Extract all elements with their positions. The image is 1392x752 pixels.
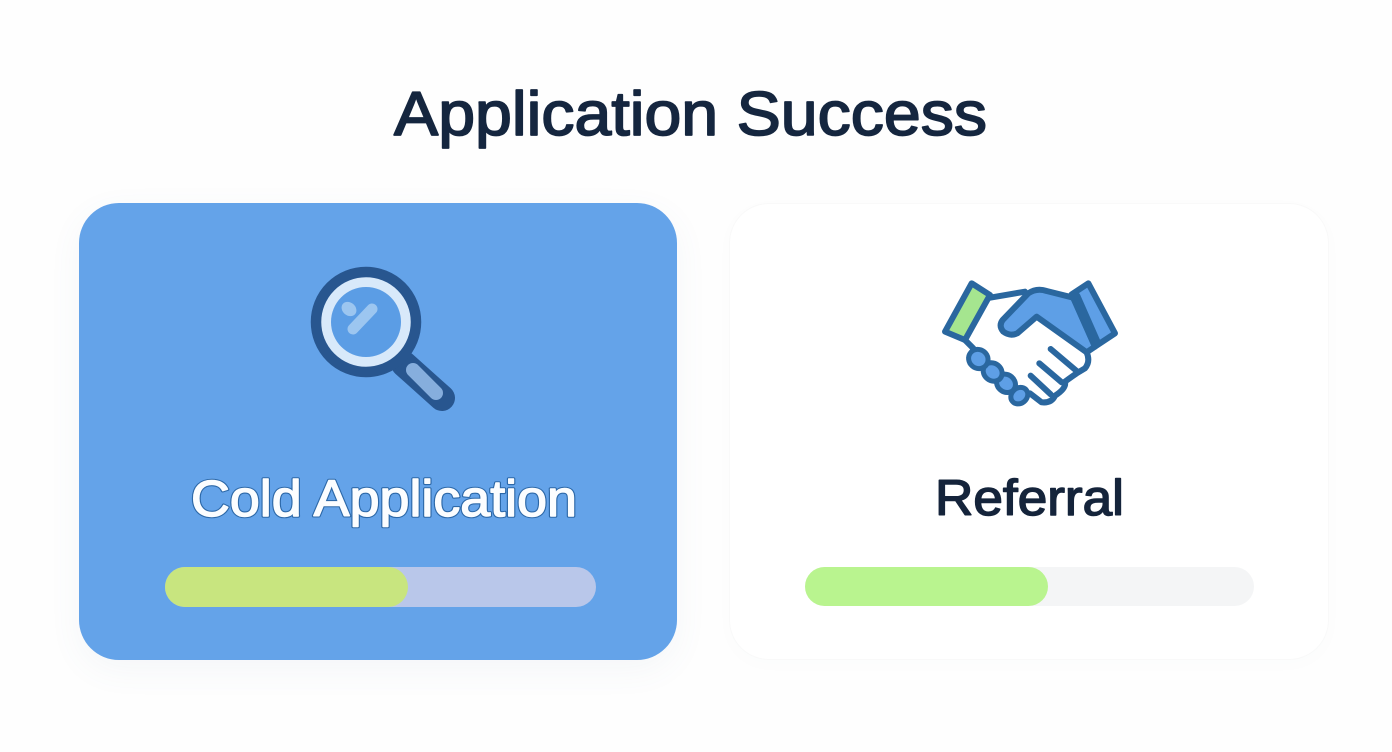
left knuckles (965, 345, 1031, 407)
blue hand (1001, 290, 1095, 352)
white fingers outline (1030, 352, 1088, 402)
left cuff (945, 283, 990, 340)
right cuff (1072, 283, 1115, 347)
title: Application Success (394, 80, 987, 149)
heading: cold application: Cold Application (191, 470, 577, 527)
progress bar: referral (805, 567, 1254, 606)
heading: cold application: Cold Application (191, 470, 577, 527)
icon: handshake (945, 283, 1115, 407)
panel: referral card background (729, 203, 1329, 660)
heading: referral: Referral (935, 470, 1124, 526)
progress bar: cold application (165, 567, 596, 607)
icon: magnifying glass (316, 272, 442, 398)
panel: cold application card background (79, 203, 677, 660)
white hands body (967, 290, 1093, 402)
